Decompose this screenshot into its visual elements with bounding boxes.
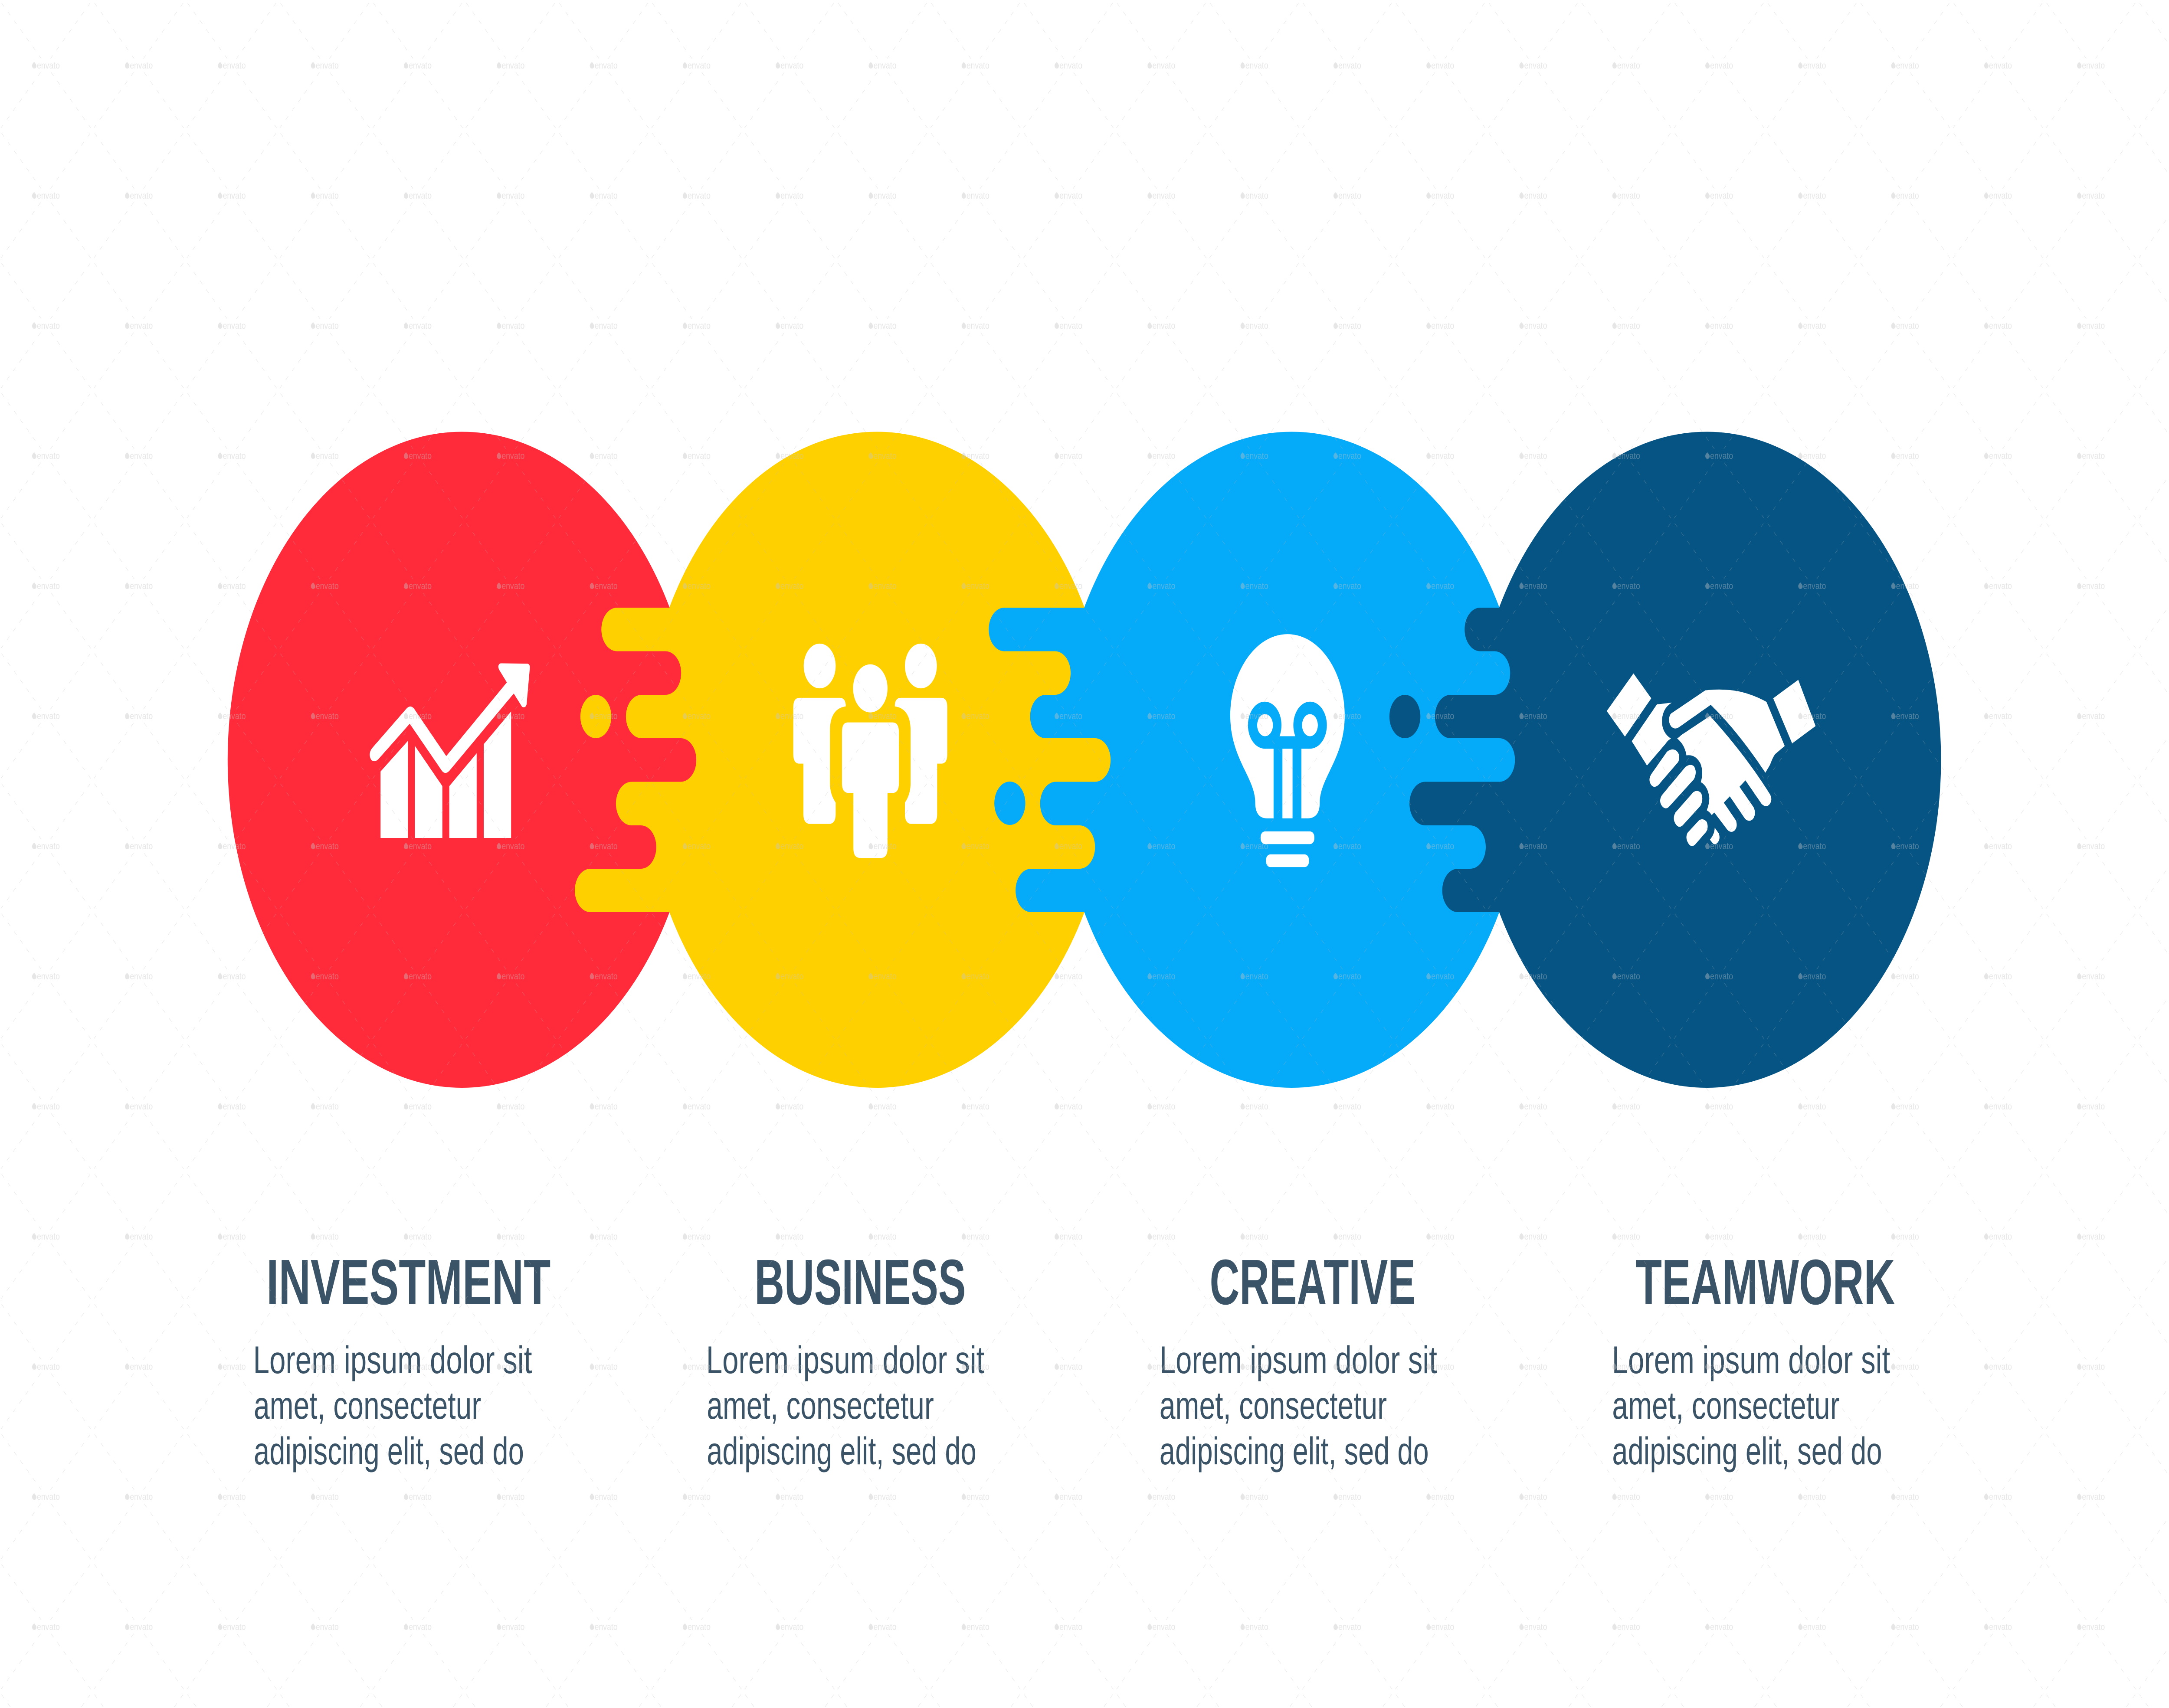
text block: teamwork: amet, consectetur (1612, 1384, 1840, 1427)
interlocking fingers: blue into yellow (989, 608, 1190, 912)
text block: creative: CREATIVE (1210, 1247, 1415, 1318)
text block: business: adipiscing elit, sed do (707, 1430, 976, 1473)
text block: investment (253, 1247, 550, 1473)
icon: rising bar chart with arrow (370, 663, 530, 838)
circle: business (642, 432, 1111, 1088)
circle: teamwork (1472, 432, 1941, 1088)
text block: teamwork (1612, 1247, 1895, 1473)
interlocking fingers: yellow into red (575, 608, 775, 912)
text block: investment: INVESTMENT (266, 1247, 550, 1318)
circle: creative (1058, 432, 1526, 1088)
text block: teamwork: TEAMWORK (1635, 1247, 1895, 1318)
icon: handshake (1607, 674, 1815, 846)
icon: group of three people (793, 644, 947, 858)
text block: creative (1160, 1247, 1437, 1473)
icon: light bulb (1230, 634, 1345, 867)
text block: investment: adipiscing elit, sed do (254, 1430, 524, 1473)
text block: teamwork: Lorem ipsum dolor sit (1612, 1339, 1890, 1382)
text block: business (706, 1247, 984, 1473)
text block: creative: adipiscing elit, sed do (1160, 1430, 1429, 1473)
circle: investment (228, 432, 696, 1088)
text block: business: amet, consectetur (707, 1384, 934, 1427)
text block: business: Lorem ipsum dolor sit (706, 1339, 984, 1382)
text block: investment: Lorem ipsum dolor sit (253, 1339, 532, 1382)
text block: creative: Lorem ipsum dolor sit (1160, 1339, 1437, 1382)
text block: business: BUSINESS (754, 1247, 966, 1318)
interlocking fingers: navy into blue (1389, 608, 1605, 912)
text block: teamwork: adipiscing elit, sed do (1612, 1430, 1882, 1473)
text block: creative: amet, consectetur (1160, 1384, 1387, 1427)
text block: investment: amet, consectetur (254, 1384, 481, 1427)
